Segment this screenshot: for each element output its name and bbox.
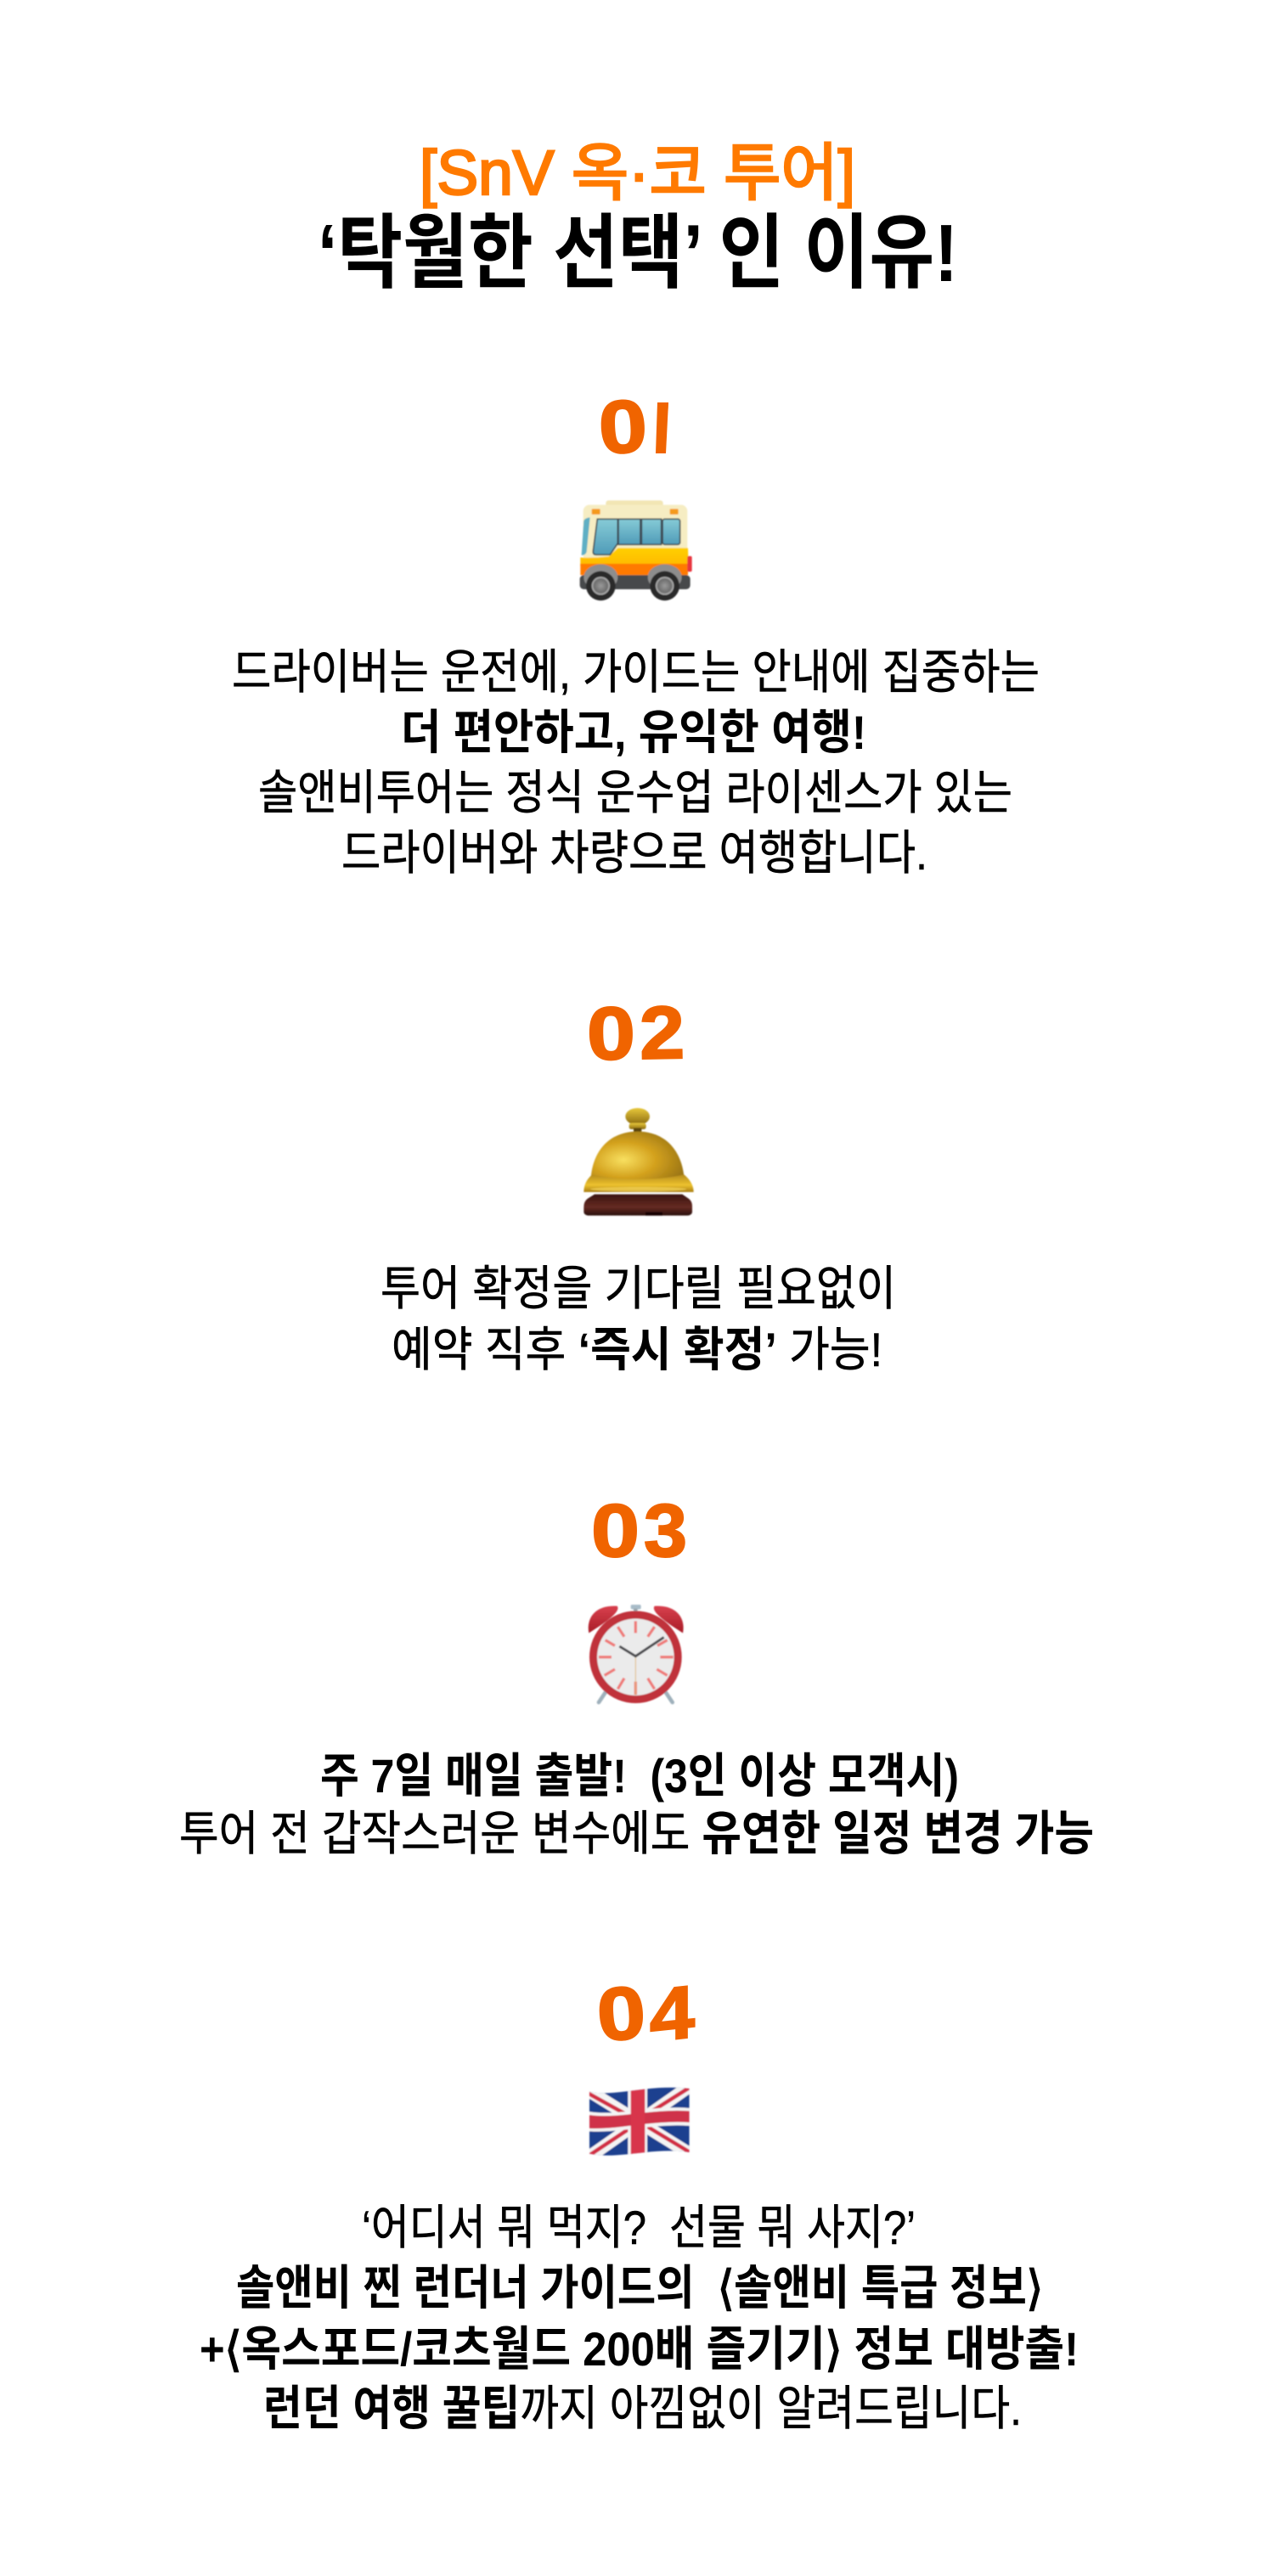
text block 01: 더 편안하고, 유익한 여행!: [401, 706, 866, 759]
number 03: 0: [591, 1488, 640, 1572]
panel: reason 03: [179, 1488, 1094, 1860]
icon: UK flag: [588, 2087, 691, 2157]
text block 04: +⟨옥스포드/코츠월드 200배 즐기기⟩ 정보 대방출!: [200, 2322, 1079, 2376]
number 03: [591, 1488, 687, 1572]
title line 2: black heading: ‘탁월한 선택’ 인 이유!: [318, 208, 958, 299]
text block 04: [200, 2201, 1079, 2435]
text block 01: [232, 645, 1040, 880]
number 04: 4: [650, 1969, 695, 2058]
number 03: 3: [644, 1488, 687, 1572]
text block 04: ‘어디서 뭐 먹지? 선물 뭐 사지?’: [362, 2201, 916, 2254]
text block 01: 드라이버와 차량으로 여행합니다.: [341, 826, 927, 880]
text block 01: 솔앤비투어는 정식 운수업 라이센스가 있는: [258, 766, 1012, 819]
number 04: 0: [595, 1970, 648, 2057]
number 02: 0: [586, 991, 636, 1076]
text block 02: 예약 직후 ‘즉시 확정’ 가능!: [392, 1323, 882, 1376]
number 04: [595, 1969, 695, 2058]
text block 03: 투어 전 갑작스러운 변수에도 유연한 일정 변경 가능: [179, 1807, 1094, 1860]
number 01: 0: [596, 384, 649, 470]
icon: alarm clock: [589, 1605, 684, 1703]
title block: [318, 138, 958, 299]
text block 03: 주 7일 매일 출발! (3인 이상 모객시): [320, 1749, 959, 1803]
text block 02: 투어 확정을 기다릴 필요없이: [381, 1262, 896, 1315]
panel: reason 02: [381, 990, 896, 1376]
number 01: [601, 399, 668, 454]
text block 02: [381, 1262, 896, 1376]
icon: service bell: [583, 1108, 694, 1216]
number 01: 1: [629, 371, 690, 495]
icon: minibus: [580, 500, 692, 600]
title line 1: orange tour name: [SnV 옥·코 투어]: [420, 138, 855, 208]
number 02: 2: [639, 990, 685, 1075]
text block 04: 솔앤비 찐 런더너 가이드의 ⟨솔앤비 특급 정보⟩: [236, 2261, 1043, 2314]
text block 04: 런던 여행 꿀팁까지 아낌없이 알려드립니다.: [263, 2382, 1022, 2435]
text block 03: [179, 1749, 1094, 1860]
panel: reason 04: [200, 1969, 1079, 2435]
panel: reason 01: [232, 371, 1040, 880]
text block 01: 드라이버는 운전에, 가이드는 안내에 집중하는: [232, 645, 1040, 699]
number 02: [586, 990, 685, 1076]
